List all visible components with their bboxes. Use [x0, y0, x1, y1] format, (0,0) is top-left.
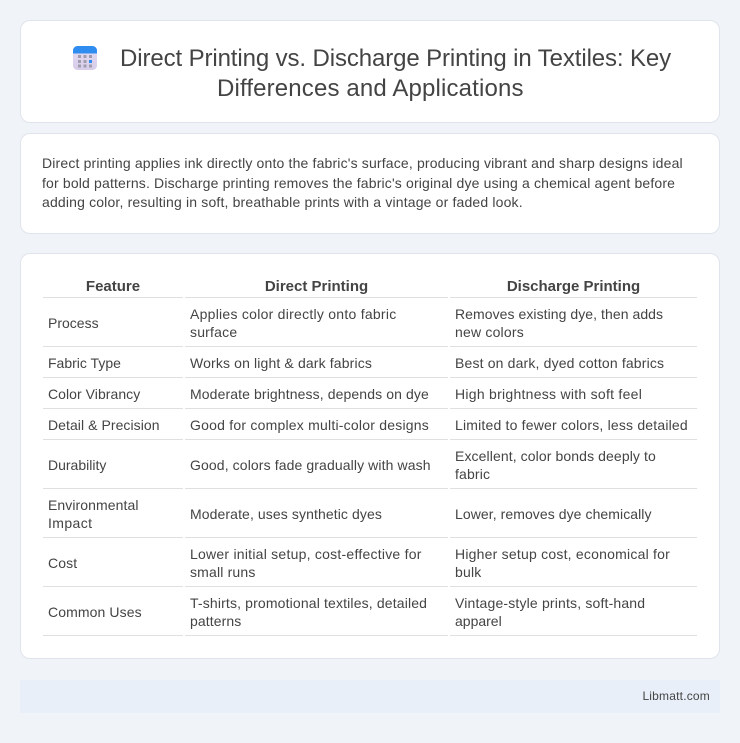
- row: process: Process: [48, 315, 99, 331]
- table header row: Discharge Printing: [507, 278, 640, 295]
- row: durability: Durability: [48, 457, 106, 473]
- row: detail and precision: [43, 417, 697, 440]
- footer: [20, 680, 720, 713]
- description text: adding color, resulting in soft, breathable prints with a vintage or faded look.: [42, 194, 523, 210]
- row: durability: fabric: [455, 466, 490, 482]
- table header row: [43, 278, 697, 298]
- row: cost: [43, 546, 697, 587]
- row: environmental impact: Lower, removes dye chemically: [455, 506, 652, 522]
- row: color vibrancy: Color Vibrancy: [48, 386, 140, 402]
- icon: calendar grid: [73, 46, 97, 70]
- row: cost: Cost: [48, 555, 77, 571]
- title: Direct Printing vs. Discharge Printing in Textiles: Key: [120, 45, 671, 72]
- row: cost: Lower initial setup, cost-effective for: [190, 546, 422, 562]
- table card: [20, 253, 720, 659]
- row: detail and precision: Limited to fewer colors, less detailed: [455, 417, 688, 433]
- footer brand: Libmatt.com: [642, 689, 710, 703]
- row: common uses: patterns: [190, 613, 241, 629]
- row: cost: bulk: [455, 564, 481, 580]
- row: fabric type: Best on dark, dyed cotton fabrics: [455, 355, 664, 371]
- row: common uses: apparel: [455, 613, 502, 629]
- table header row: Direct Printing: [265, 278, 368, 295]
- row: durability: Good, colors fade gradually with wash: [190, 457, 431, 473]
- row: common uses: Common Uses: [48, 604, 142, 620]
- title: [120, 45, 671, 102]
- row: cost: small runs: [190, 564, 256, 580]
- row: environmental impact: Environmental: [48, 497, 139, 513]
- row: process: new colors: [455, 324, 524, 340]
- title card: [20, 20, 720, 123]
- row: common uses: T-shirts, promotional textiles, detailed: [190, 595, 427, 611]
- row: detail and precision: Detail & Precision: [48, 417, 160, 433]
- row: process: Removes existing dye, then adds: [455, 306, 663, 322]
- description text: for bold patterns. Discharge printing removes the fabric's original dye using a chemical agent before: [42, 175, 675, 191]
- comparison table: [43, 278, 697, 636]
- row: color vibrancy: Moderate brightness, depends on dye: [190, 386, 429, 402]
- description card: [20, 133, 720, 234]
- description text: [42, 155, 683, 210]
- row: environmental impact: [43, 497, 697, 538]
- row: common uses: Vintage-style prints, soft-hand: [455, 595, 645, 611]
- row: durability: Excellent, color bonds deeply to: [455, 448, 656, 464]
- row: fabric type: Works on light & dark fabrics: [190, 355, 372, 371]
- row: color vibrancy: High brightness with soft feel: [455, 386, 642, 402]
- row: fabric type: Fabric Type: [48, 355, 121, 371]
- description text: Direct printing applies ink directly onto the fabric's surface, producing vibrant and sharp designs ideal: [42, 155, 683, 171]
- row: process: [43, 306, 697, 347]
- row: color vibrancy: [43, 386, 697, 409]
- table header row: Feature: [86, 278, 140, 295]
- row: environmental impact: Moderate, uses synthetic dyes: [190, 506, 382, 522]
- row: durability: [43, 448, 697, 489]
- row: fabric type: [43, 355, 697, 378]
- row: environmental impact: Impact: [48, 515, 92, 531]
- row: cost: Higher setup cost, economical for: [455, 546, 670, 562]
- title: Differences and Applications: [217, 75, 524, 102]
- row: common uses: [43, 595, 697, 636]
- row: detail and precision: Good for complex multi-color designs: [190, 417, 429, 433]
- row: process: surface: [190, 324, 237, 340]
- row: process: Applies color directly onto fabric: [190, 306, 396, 322]
